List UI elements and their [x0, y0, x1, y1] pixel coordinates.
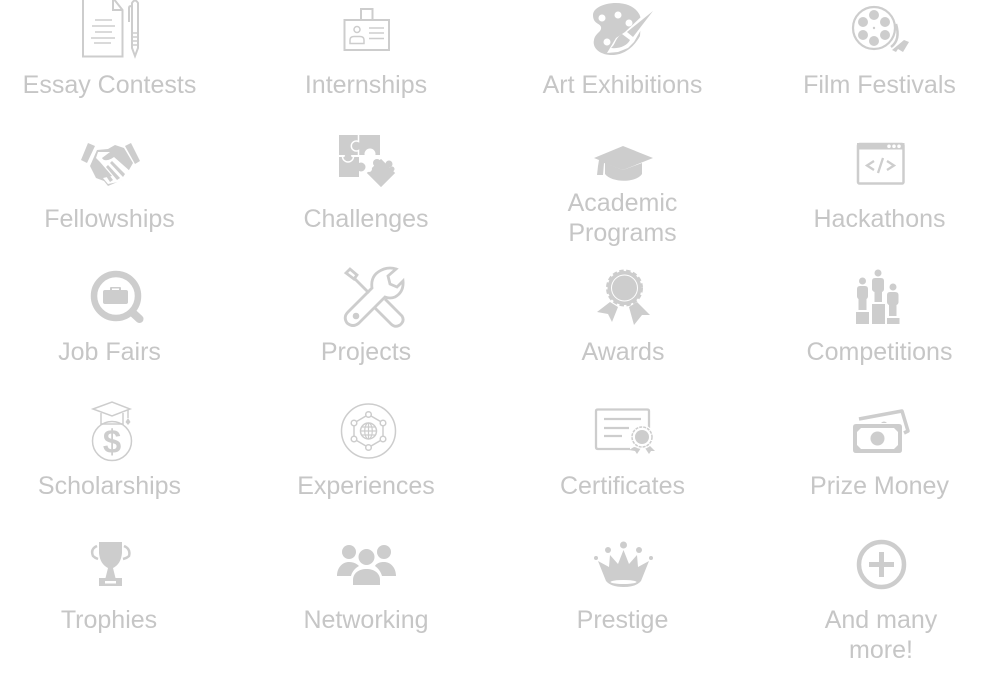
item: Awards	[582, 270, 664, 366]
item: Job Fairs	[58, 274, 161, 366]
item: Scholarships	[38, 402, 181, 500]
icon: magnifier with briefcase	[94, 274, 140, 319]
label: Networking	[303, 606, 429, 634]
label: Projects	[321, 338, 411, 366]
item: And many more!	[825, 542, 938, 664]
icon: plus in circle	[859, 542, 904, 587]
icon: handshake	[81, 143, 140, 186]
icon: crown	[594, 542, 653, 587]
label: Academic	[568, 189, 677, 217]
item: Networking	[303, 545, 429, 634]
label: Prestige	[577, 606, 668, 634]
icon: code window	[857, 143, 904, 184]
icon: wrench and screwdriver	[345, 268, 403, 326]
icon: trophy	[92, 542, 129, 586]
label: Challenges	[303, 205, 429, 233]
item: Certificates	[560, 410, 685, 500]
item: Prize Money	[810, 411, 949, 500]
item: Academic Programs: Programs	[568, 219, 677, 247]
icon: puzzle pieces	[339, 135, 395, 187]
item: Projects	[321, 268, 411, 366]
label: Experiences	[297, 472, 435, 500]
label: Trophies	[61, 606, 157, 634]
item: And many more!: more!	[849, 636, 913, 664]
label: Fellowships	[44, 205, 175, 233]
item: Competitions	[807, 270, 952, 366]
label: Hackathons	[813, 205, 946, 233]
icon: certificate with seal	[596, 410, 655, 454]
item: Challenges	[303, 135, 429, 233]
icon: palette and brush	[593, 3, 656, 55]
item: Art Exhibitions	[543, 3, 702, 99]
label: Film Festivals	[803, 71, 956, 99]
icon: cap and money bag: $	[103, 423, 121, 460]
item: Academic Programs	[568, 146, 677, 247]
item: Hackathons	[813, 143, 946, 233]
icon: rosette	[597, 270, 650, 325]
label: Prize Money	[810, 472, 949, 500]
label: Internships	[305, 71, 427, 99]
icon: cap and money bag	[92, 402, 132, 460]
item: Trophies	[61, 542, 157, 634]
icon: graduation cap	[594, 146, 653, 181]
icon: document and pen	[83, 0, 138, 56]
icon: film reel	[853, 7, 909, 52]
label: Awards	[582, 338, 664, 366]
item: Essay Contests	[23, 0, 196, 99]
label: Scholarships	[38, 472, 181, 500]
item: Fellowships	[44, 143, 175, 233]
icon: ID badge	[344, 9, 389, 50]
label: Art Exhibitions	[543, 71, 702, 99]
icon: globe network	[342, 404, 396, 458]
label: Certificates	[560, 472, 685, 500]
item: Film Festivals	[803, 7, 956, 99]
item: Internships	[305, 9, 427, 99]
icon: group of people	[337, 545, 396, 585]
label: Job Fairs	[58, 338, 161, 366]
label: And many	[825, 606, 938, 634]
icon: banknotes	[853, 411, 908, 453]
icon: people on podium	[856, 270, 900, 324]
label: Competitions	[807, 338, 952, 366]
label: Essay Contests	[23, 71, 196, 99]
item: Prestige	[577, 542, 668, 634]
item: Experiences	[297, 404, 435, 500]
